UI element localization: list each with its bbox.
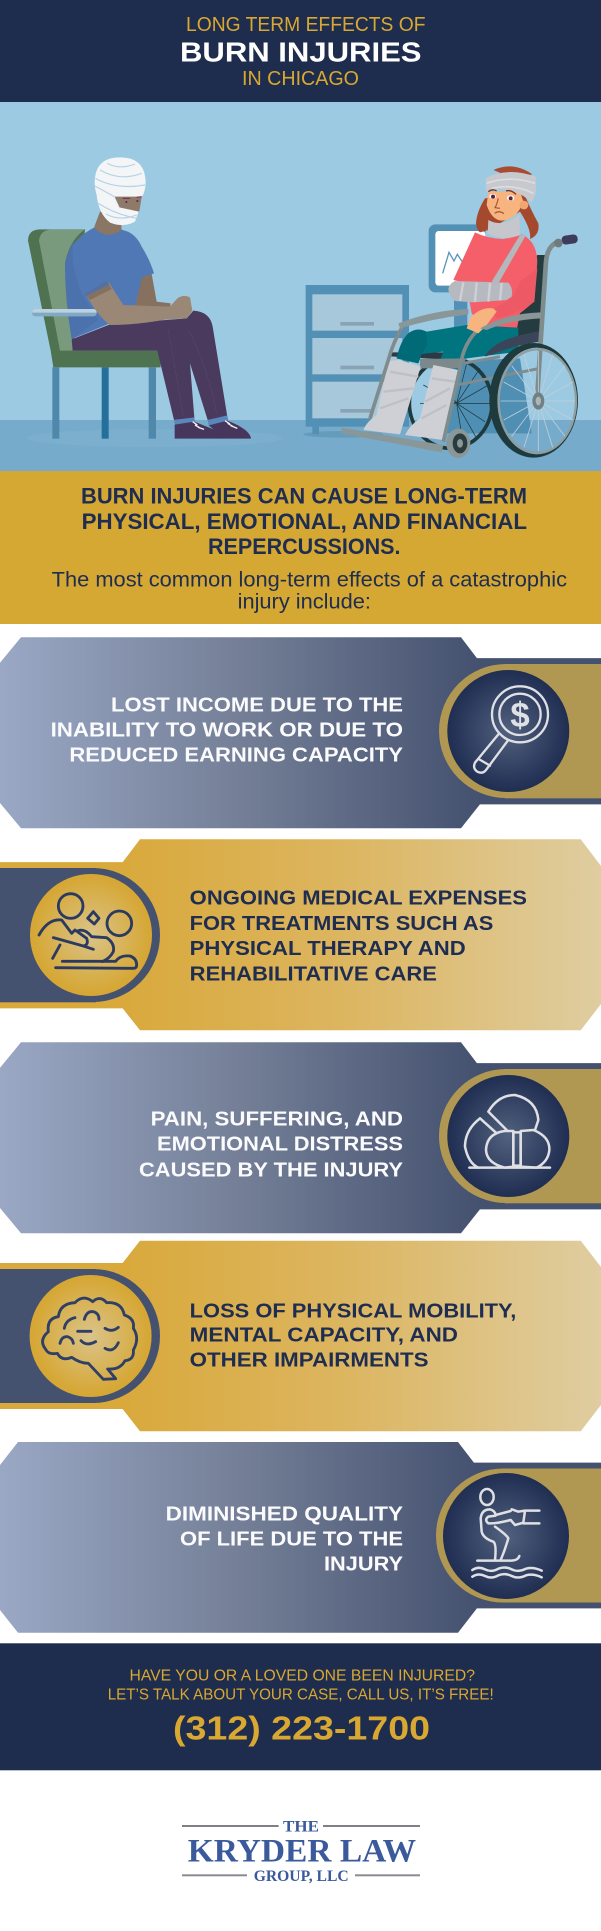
figure: woman in wheelchair, cabinet and monitor — [303, 166, 578, 458]
heading: intro: BURN INJURIES CAN CAUSE LONG-TERM — [81, 483, 527, 508]
text: intro sentence — [52, 569, 567, 614]
icon: water skier — [472, 1489, 542, 1578]
text: lost income — [51, 695, 404, 767]
icon: pills — [465, 1095, 550, 1168]
icon: brain — [43, 1298, 137, 1379]
footer call to action: HAVE YOU OR A LOVED ONE BEEN INJURED? — [130, 1667, 475, 1684]
text: quality of life: INJURY — [324, 1554, 404, 1576]
header: BURN INJURIES — [180, 36, 422, 67]
panel: loss of mobility — [0, 1241, 601, 1431]
text: medical expenses: FOR TREATMENTS SUCH AS — [190, 913, 493, 935]
text: pain and suffering: PAIN, SUFFERING, AND — [151, 1109, 403, 1131]
heading: intro: PHYSICAL, EMOTIONAL, AND FINANCIAL — [82, 509, 527, 534]
logo: The Kryder Law Group, LLC: THE — [283, 1819, 319, 1836]
panel: medical expenses — [0, 839, 601, 1030]
text: medical expenses: ONGOING MEDICAL EXPENSES — [190, 888, 527, 910]
footer call to action — [0, 1643, 601, 1770]
illustration: hospital room scene — [0, 102, 601, 471]
text: pain and suffering: CAUSED BY THE INJURY — [139, 1160, 404, 1182]
text: medical expenses — [190, 888, 527, 986]
panel: quality of life — [0, 1442, 601, 1633]
icon: physical therapy — [39, 894, 137, 968]
text: intro sentence: injury include: — [238, 591, 371, 614]
panel: pain and suffering — [0, 1042, 601, 1233]
text: lost income: INABILITY TO WORK OR DUE TO — [51, 720, 403, 742]
header: LONG TERM EFFECTS OF — [186, 14, 426, 36]
text: pain and suffering — [139, 1109, 404, 1182]
panel: lost income — [0, 637, 601, 828]
text: loss of mobility: MENTAL CAPACITY, AND — [190, 1325, 458, 1347]
text: lost income: REDUCED EARNING CAPACITY — [69, 745, 404, 767]
text: lost income: LOST INCOME DUE TO THE — [111, 695, 403, 717]
text: quality of life: OF LIFE DUE TO THE — [180, 1529, 403, 1551]
header: IN CHICAGO — [242, 68, 359, 90]
text: loss of mobility: OTHER IMPAIRMENTS — [190, 1350, 428, 1372]
heading: intro — [81, 483, 527, 559]
footer call to action: (312) 223-1700 — [173, 1709, 430, 1746]
footer call to action: LET’S TALK ABOUT YOUR CASE, CALL US, IT’S FREE! — [108, 1686, 494, 1703]
text: quality of life — [166, 1504, 404, 1576]
logo: The Kryder Law Group, LLC: GROUP, LLC — [254, 1868, 349, 1885]
text: medical expenses: PHYSICAL THERAPY AND — [190, 938, 466, 960]
heading: intro: REPERCUSSIONS. — [208, 534, 400, 559]
icon: magnifying glass with dollar sign — [474, 686, 548, 773]
icon: magnifying glass with dollar sign: $ — [510, 696, 530, 735]
figure: man in chair with bandaged head — [28, 157, 251, 439]
header — [0, 0, 601, 102]
logo: The Kryder Law Group, LLC — [182, 1819, 420, 1885]
text: quality of life: DIMINISHED QUALITY — [166, 1504, 404, 1526]
text: medical expenses: REHABILITATIVE CARE — [190, 964, 437, 986]
logo: The Kryder Law Group, LLC: KRYDER LAW — [188, 1834, 416, 1870]
text: loss of mobility — [190, 1300, 516, 1372]
intro panel — [0, 471, 601, 624]
text: pain and suffering: EMOTIONAL DISTRESS — [157, 1134, 403, 1156]
text: loss of mobility: LOSS OF PHYSICAL MOBILITY, — [190, 1300, 516, 1322]
text: intro sentence: The most common long-term effects of a catastrophic — [52, 569, 567, 592]
